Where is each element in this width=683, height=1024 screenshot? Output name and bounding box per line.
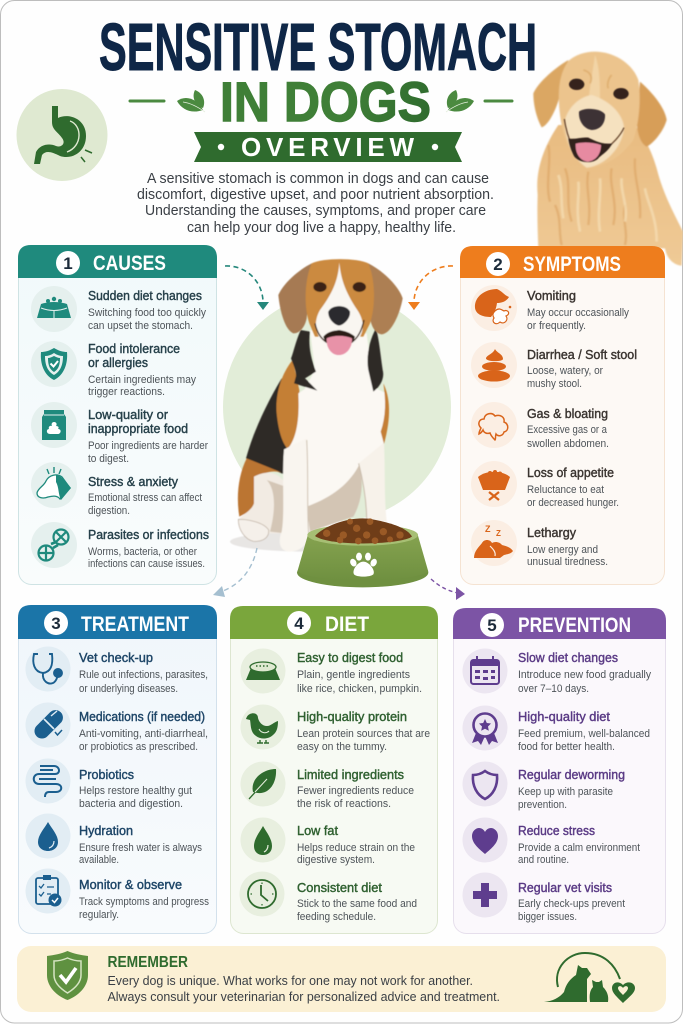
panel: symptoms <box>460 246 665 584</box>
icon: dog, cat and heart logo <box>544 953 635 1003</box>
item: easy to digest food: like rice, chicken, pumpkin. <box>297 683 422 695</box>
photo: beagle with bowl <box>230 259 428 587</box>
icon: vomiting dog <box>475 289 511 324</box>
item: limited ingredients <box>240 762 414 810</box>
item: slow diet changes: Introduce new food gradually <box>518 669 651 681</box>
item: gas and bloating: Gas & bloating <box>527 406 608 421</box>
intro paragraph: discomfort, digestive upset, and poor nutrient absorption. <box>137 187 494 203</box>
item: diarrhea: Loose, watery, or <box>527 365 603 377</box>
item: hydration: Ensure fresh water is always <box>79 842 202 854</box>
item: probiotics: bacteria and digestion. <box>79 798 183 810</box>
ribbon: overview <box>194 132 462 162</box>
item: low-quality food: inappropriate food <box>88 421 188 436</box>
icon: capsule <box>31 707 66 742</box>
item: low fat <box>240 818 415 866</box>
panel header: treatment <box>18 605 217 639</box>
item: low-quality food: Poor ingredients are harder <box>88 440 208 452</box>
item: consistent diet: feeding schedule. <box>297 911 376 923</box>
item: sudden diet changes <box>31 286 206 332</box>
title ornament: left leaves and dash <box>130 90 205 112</box>
photo: golden retriever <box>533 52 683 266</box>
item: food intolerance: or allergies <box>88 355 148 370</box>
item: parasites or infections: Parasites or infections <box>88 527 209 542</box>
icon: shield check <box>41 348 67 380</box>
item: vet check-up: Vet check-up <box>79 650 153 665</box>
panel header: symptoms <box>460 246 665 278</box>
icon: stomach <box>16 89 108 181</box>
item: high-quality diet: Feed premium, well-balanced <box>518 728 650 740</box>
heading: remember: REMEMBER <box>108 954 188 971</box>
icon: anxious dog <box>37 467 71 500</box>
item: regular vet visits: bigger issues. <box>518 911 577 923</box>
item: medications: Medications (if needed) <box>79 709 205 724</box>
text: remember note: Always consult your veterinarian for personalized advice and treatment. <box>108 989 500 1004</box>
arrow: symptoms to dog <box>408 266 453 310</box>
item: easy to digest food: Plain, gentle ingredients <box>297 669 410 681</box>
item: regular deworming: Keep up with parasite <box>518 786 613 798</box>
item: loss of appetite <box>471 461 619 509</box>
icon: shield check <box>47 951 88 1000</box>
item: lethargy <box>471 520 608 568</box>
item: low-quality food: Low-quality or <box>88 407 169 422</box>
panel header: causes: 1 <box>63 254 73 273</box>
food bowl <box>297 518 428 587</box>
item: limited ingredients: Limited ingredients <box>297 767 404 782</box>
icon: intestines <box>34 766 61 797</box>
icon: chicken <box>246 713 278 743</box>
icon: food bag <box>42 410 66 440</box>
beagle head <box>278 259 403 355</box>
item: loss of appetite: Loss of appetite <box>527 465 614 480</box>
item: high-quality protein: High-quality protein <box>297 709 407 724</box>
panel header: diet: 4 <box>294 614 304 633</box>
icon: plus <box>473 883 497 907</box>
icon: stool <box>478 349 510 382</box>
icon: paw print <box>349 553 378 577</box>
icon: sleeping dog <box>474 524 513 558</box>
item: sudden diet changes: can upset the stomach. <box>88 320 193 332</box>
item: food intolerance: Food intolerance <box>88 341 180 356</box>
item: easy to digest food <box>240 648 422 695</box>
title ornament: right leaves and dash <box>446 90 512 112</box>
intro paragraph: A sensitive stomach is common in dogs and can cause <box>147 171 489 187</box>
icon: rosette <box>472 714 498 745</box>
panel: treatment <box>18 605 217 934</box>
item: low fat: Low fat <box>297 823 338 838</box>
panel header: causes: CAUSES <box>93 252 166 275</box>
item: regular vet visits <box>462 872 626 923</box>
arrow: dog to prevention <box>431 579 465 600</box>
item: medications: Anti-vomiting, anti-diarrheal, <box>79 728 208 740</box>
icon: leaf <box>249 769 276 799</box>
item: reduce stress: and routine. <box>518 854 569 866</box>
item: sudden diet changes: Switching food too quickly <box>88 307 206 319</box>
item: lethargy: Low energy and <box>527 544 598 556</box>
item: slow diet changes <box>462 648 651 695</box>
item: low-quality food: to digest. <box>88 453 129 465</box>
icon: stethoscope <box>33 654 62 684</box>
item: vet check-up <box>26 646 208 695</box>
item: stress and anxiety: Emotional stress can affect <box>88 492 203 504</box>
item: high-quality protein: easy on the tummy. <box>297 741 387 753</box>
panel header: symptoms: SYMPTOMS <box>523 253 621 276</box>
item: stress and anxiety <box>31 462 203 517</box>
icon: bacteria <box>38 530 68 560</box>
arrow: dog to treatment <box>213 548 257 597</box>
icon: sleeping dog: Z <box>496 529 501 538</box>
item: vet check-up: Rule out infections, parasites, <box>79 669 208 681</box>
item: slow diet changes: Slow diet changes <box>518 650 618 665</box>
panel header: symptoms: 2 <box>493 255 503 274</box>
panel header: prevention <box>453 608 666 639</box>
arrow: causes to dog <box>225 266 269 310</box>
item: stress and anxiety: digestion. <box>88 505 130 517</box>
item: easy to digest food: Easy to digest food <box>297 650 403 665</box>
item: hydration: Hydration <box>79 823 133 838</box>
icon: calendar <box>471 656 499 684</box>
item: diarrhea <box>471 342 637 390</box>
item: reduce stress <box>462 818 641 866</box>
icon: shield <box>473 771 497 799</box>
intro paragraph: can help your dog live a happy, healthy life. <box>187 220 456 236</box>
item: limited ingredients: Fewer ingredients reduce <box>297 785 414 797</box>
panel: causes <box>18 245 217 584</box>
item: monitor and observe: Monitor & observe <box>79 877 182 892</box>
text: remember note: Every dog is unique. What works for one may not work for another. <box>108 973 473 988</box>
icon: bowl <box>37 297 71 318</box>
item: limited ingredients: the risk of reactions. <box>297 798 391 810</box>
panel header: causes <box>18 245 217 278</box>
item: high-quality diet: High-quality diet <box>518 709 610 724</box>
item: stress and anxiety: Stress & anxiety <box>88 474 179 489</box>
panel header: diet <box>230 606 438 639</box>
item: monitor and observe: Track symptoms and progress <box>79 896 209 908</box>
ribbon: overview: OVERVIEW <box>241 132 414 162</box>
item: loss of appetite: Reluctance to eat <box>527 484 605 496</box>
icon: oil drop <box>254 826 272 855</box>
item: hydration <box>26 814 202 866</box>
item: vomiting <box>471 285 629 332</box>
title: In Dogs: IN DOGS <box>220 70 431 133</box>
item: food intolerance: trigger reactions. <box>88 386 165 398</box>
panel: remember <box>17 946 666 1012</box>
item: vet check-up: or underlying diseases. <box>79 683 178 695</box>
panel header: prevention: 5 <box>487 616 497 635</box>
panel: diet <box>230 606 438 934</box>
item: regular deworming: prevention. <box>518 799 567 811</box>
icon: gas cloud <box>479 414 508 440</box>
item: consistent diet: Stick to the same food and <box>297 898 417 910</box>
item: lethargy: Lethargy <box>527 525 577 540</box>
panel header: diet: DIET <box>325 613 369 636</box>
item: diarrhea: Diarrhea / Soft stool <box>527 347 637 362</box>
item: low fat: Helps reduce strain on the <box>297 842 415 854</box>
icon: food bowl <box>246 662 280 680</box>
panel: prevention <box>453 608 666 934</box>
icon: clipboard <box>36 875 62 906</box>
item: gas and bloating: Excessive gas or a <box>527 424 608 436</box>
item: vomiting: Vomiting <box>527 288 576 303</box>
intro paragraph: Understanding the causes, symptoms, and proper care <box>145 203 486 219</box>
item: monitor and observe: regularly. <box>79 909 119 921</box>
item: diarrhea: mushy stool. <box>527 378 582 390</box>
item: parasites or infections: infections can cause issues. <box>88 558 205 570</box>
item: medications <box>26 702 208 753</box>
text: remember note <box>108 973 500 1004</box>
item: sudden diet changes: Sudden diet changes <box>88 288 202 303</box>
item: high-quality protein <box>240 704 430 753</box>
item: food intolerance: Certain ingredients may <box>88 374 196 386</box>
item: high-quality protein: Lean protein sources that are <box>297 728 430 740</box>
item: parasites or infections <box>31 522 209 570</box>
item: high-quality diet: food for better health. <box>518 741 615 753</box>
item: slow diet changes: over 7–10 days. <box>518 683 589 695</box>
item: lethargy: unusual tiredness. <box>527 556 608 568</box>
item: vomiting: May occur occasionally <box>527 307 629 319</box>
item: regular vet visits: Regular vet visits <box>518 880 612 895</box>
icon: bowl with cross <box>478 470 510 500</box>
icon: sleeping dog: Z <box>485 524 491 534</box>
item: high-quality diet <box>462 706 650 753</box>
panel header: prevention: PREVENTION <box>518 614 631 637</box>
item: food intolerance <box>31 341 196 398</box>
icon: heart <box>472 828 498 854</box>
item: regular deworming <box>462 762 625 811</box>
item: probiotics: Probiotics <box>79 767 134 782</box>
item: reduce stress: Provide a calm environment <box>518 842 641 854</box>
item: parasites or infections: Worms, bacteria, or other <box>88 546 197 558</box>
item: probiotics: Helps restore healthy gut <box>79 785 193 797</box>
item: regular deworming: Regular deworming <box>518 767 625 782</box>
item: gas and bloating <box>471 402 609 450</box>
icon: clock <box>248 880 276 908</box>
item: consistent diet <box>240 872 417 923</box>
icon: water drop <box>38 822 58 851</box>
intro paragraph <box>137 171 494 236</box>
item: regular vet visits: Early check-ups prevent <box>518 898 626 910</box>
item: loss of appetite: or decreased hunger. <box>527 497 619 509</box>
item: gas and bloating: swollen abdomen. <box>527 438 609 450</box>
item: monitor and observe <box>26 868 209 921</box>
panel header: treatment: 3 <box>51 614 61 633</box>
item: low fat: digestive system. <box>297 854 375 866</box>
panel header: treatment: TREATMENT <box>81 613 189 636</box>
item: low-quality food <box>31 402 208 465</box>
item: reduce stress: Reduce stress <box>518 823 595 838</box>
item: medications: or probiotics as prescribed. <box>79 741 198 753</box>
item: hydration: available. <box>79 854 119 866</box>
item: probiotics <box>26 758 193 810</box>
item: consistent diet: Consistent diet <box>297 880 382 895</box>
item: vomiting: or frequently. <box>527 320 586 332</box>
backdrop circle <box>223 293 451 521</box>
